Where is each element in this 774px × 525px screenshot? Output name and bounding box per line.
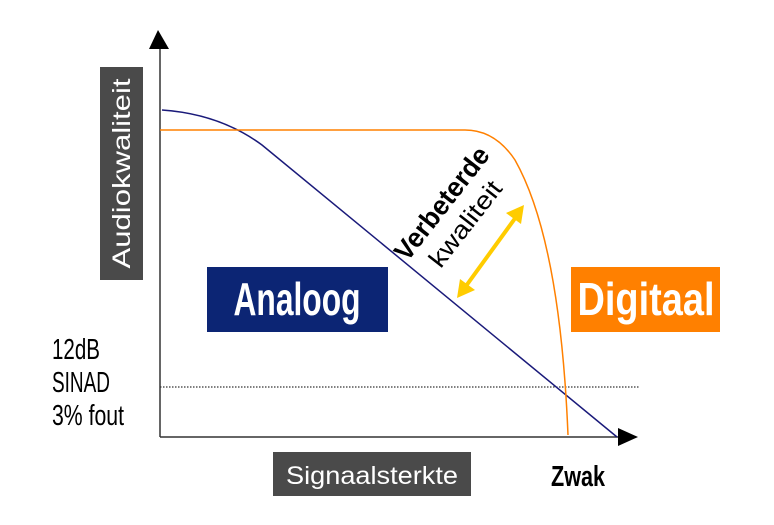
axes <box>149 30 638 446</box>
analog curve <box>162 110 617 437</box>
x-axis label: Signaalsterkte <box>286 462 458 490</box>
digital curve <box>160 130 568 435</box>
threshold label: 12dB <box>52 334 100 366</box>
label: verbeterde kwaliteit: kwaliteit <box>423 175 508 273</box>
Analoog box <box>207 267 388 332</box>
yellow double arrow <box>457 205 524 298</box>
threshold label <box>52 334 124 432</box>
Digitaal box <box>571 267 720 332</box>
label: verbeterde kwaliteit: Verbeterde <box>388 141 496 266</box>
threshold dotted line <box>160 386 640 388</box>
threshold label: SINAD <box>52 367 110 399</box>
Digitaal box: Digitaal <box>578 273 714 325</box>
y-axis label <box>100 67 143 280</box>
Zwak label: Zwak <box>551 461 606 493</box>
Analoog box: Analoog <box>234 273 360 325</box>
threshold label: 3% fout <box>52 400 124 432</box>
y-axis label: Audiokwaliteit <box>108 78 136 268</box>
x-axis label <box>273 452 471 496</box>
